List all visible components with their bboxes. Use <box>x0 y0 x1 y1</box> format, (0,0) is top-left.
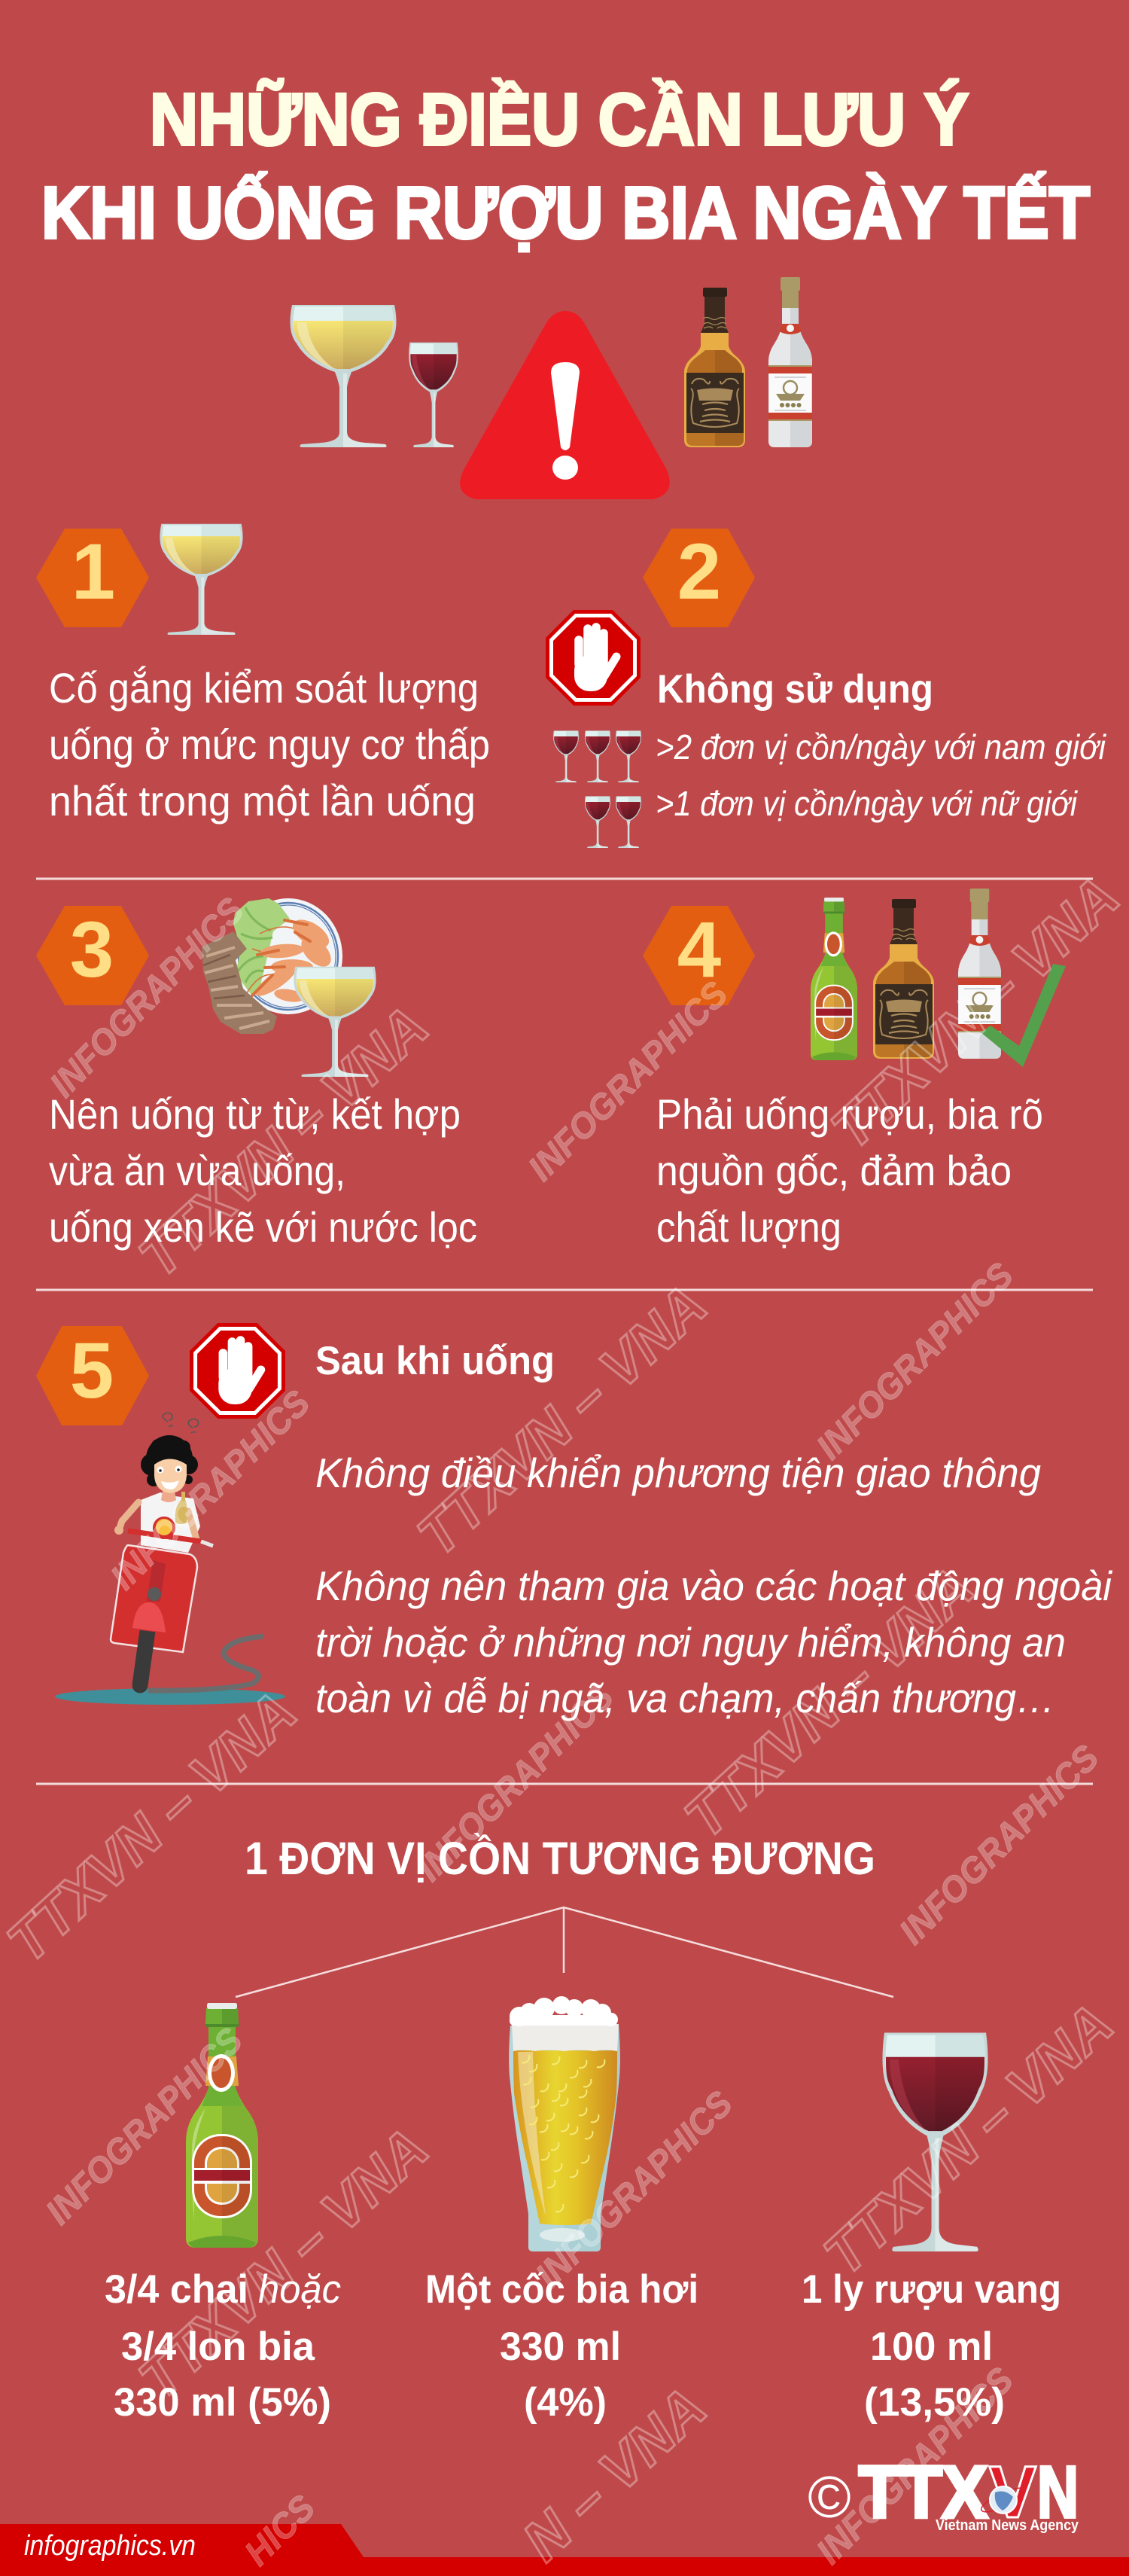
panel: step 1: 1 <box>72 528 115 616</box>
panel: step 4: Phải uống rượu, bia rõ <box>656 1090 1043 1138</box>
icon: beer glass <box>509 1996 620 2251</box>
footer bar <box>0 2524 1129 2576</box>
icon: hero drinks and warning <box>291 277 812 499</box>
panel: draught beer glass: Một cốc bia hơi <box>425 2267 698 2312</box>
panel: wine glass: 100 ml <box>870 2324 993 2369</box>
watermarks: TTXVN – VNA <box>673 1555 986 1851</box>
panel: step 3: Nên uống từ từ, kết hợp <box>49 1090 461 1138</box>
connector lines <box>236 1907 893 1997</box>
watermarks: INFOGRAPHICS <box>809 1255 1021 1468</box>
panel: draught beer glass: 330 ml <box>500 2324 621 2369</box>
title <box>41 78 1090 254</box>
watermarks: HICS <box>237 2488 323 2574</box>
panel: step 4: nguồn gốc, đảm bảo <box>656 1147 1012 1194</box>
panel: step 3: uống xen kẽ với nước lọc <box>49 1203 477 1251</box>
panel: beer bottle: hoặc <box>258 2267 341 2312</box>
panel: step 3: 3 <box>70 906 114 994</box>
watermarks: TTXVN – VNA <box>812 1992 1125 2288</box>
panel: wine glass: (13,5%) <box>864 2380 1005 2425</box>
watermarks: INFOGRAPHICS <box>521 974 735 1189</box>
footer bar: infographics.vn <box>24 2530 196 2562</box>
title: NHỮNG ĐIỀU CẦN LƯU Ý <box>150 78 969 160</box>
panel: step 3 <box>36 898 477 1251</box>
watermarks: INFOGRAPHICS <box>528 2084 741 2296</box>
panel: step 2: 2 <box>677 528 721 616</box>
panel: beer bottle: 3/4 chai <box>105 2267 248 2312</box>
heading: alcohol unit equivalents: 1 ĐƠN VỊ CỒN TƯƠNG ĐƯƠNG <box>245 1833 875 1884</box>
panel: step 2 <box>546 528 1107 848</box>
panel: step 4: chất lượng <box>656 1203 841 1251</box>
watermarks: INFOGRAPHICS <box>809 2360 1021 2572</box>
icon: bottles with check mark <box>811 889 1066 1067</box>
watermarks: N – VNA <box>511 2376 718 2574</box>
panel: step 1: nhất trong một lần uống <box>49 777 476 825</box>
logo: TTXVN: V <box>989 2451 1036 2533</box>
panel: draught beer glass <box>425 1996 698 2425</box>
panel: step 5 <box>36 1323 1113 1721</box>
watermarks: INFOGRAPHICS <box>38 2020 251 2233</box>
panel: draught beer glass: (4%) <box>524 2380 607 2425</box>
watermarks: INFOGRAPHICS <box>103 1383 318 1598</box>
panel: step 5: trời hoặc ở những nơi nguy hiểm, không an <box>315 1619 1066 1666</box>
watermarks: TTXVN – VNA <box>127 994 440 1290</box>
panel: step 5: Không điều khiển phương tiện giao thông <box>315 1450 1041 1496</box>
panel: step 5: Không nên tham gia vào các hoạt động ngoài <box>315 1562 1113 1609</box>
panel: step 4 <box>643 889 1066 1251</box>
logo: TTXVN <box>808 2451 1079 2534</box>
watermarks: TTXVN – VNA <box>127 2116 440 2412</box>
icon: food plate and glass <box>202 898 376 1077</box>
watermarks: TTXVN – VNA <box>0 1679 309 1975</box>
panel: step 3: vừa ăn vừa uống, <box>49 1147 345 1194</box>
panel: wine glass: 1 ly rượu vang <box>802 2267 1061 2312</box>
panel: step 5: 5 <box>70 1327 114 1415</box>
logo: TTXVN: © <box>808 2464 851 2530</box>
panel: beer bottle: 330 ml (5%) <box>114 2380 331 2425</box>
panel: step 1 <box>36 524 490 825</box>
watermarks: INFOGRAPHICS <box>43 891 252 1105</box>
panel: step 5: Sau khi uống <box>315 1339 555 1383</box>
panel: wine glass <box>802 2033 1061 2425</box>
watermarks <box>0 864 1129 2574</box>
watermarks: TTXVN – VNA <box>406 1273 719 1568</box>
panel: step 1: Cố gắng kiểm soát lượng <box>49 664 479 712</box>
panel: step 4: 4 <box>677 906 721 994</box>
panel: beer bottle <box>105 2003 341 2425</box>
icon: drunk scooter rider <box>55 1413 285 1705</box>
logo: TTXVN: Vietnam News Agency <box>936 2517 1079 2534</box>
logo: TTXVN: N <box>1037 2451 1079 2533</box>
panel: step 5: toàn vì dễ bị ngã, va chạm, chấn thương… <box>315 1675 1055 1721</box>
panel: step 1: uống ở mức nguy cơ thấp <box>49 721 490 768</box>
watermarks: TTXVN – VNA <box>820 864 1129 1161</box>
watermarks: INFOGRAPHICS <box>409 1677 622 1889</box>
watermarks: INFOGRAPHICS <box>892 1738 1106 1953</box>
panel: beer bottle: 3/4 lon bia <box>121 2324 315 2369</box>
logo: TTXVN: TTX <box>859 2451 987 2533</box>
panel: step 2: >1 đơn vị cồn/ngày với nữ giới <box>656 784 1079 823</box>
panel: step 2: Không sử dụng <box>657 667 933 712</box>
